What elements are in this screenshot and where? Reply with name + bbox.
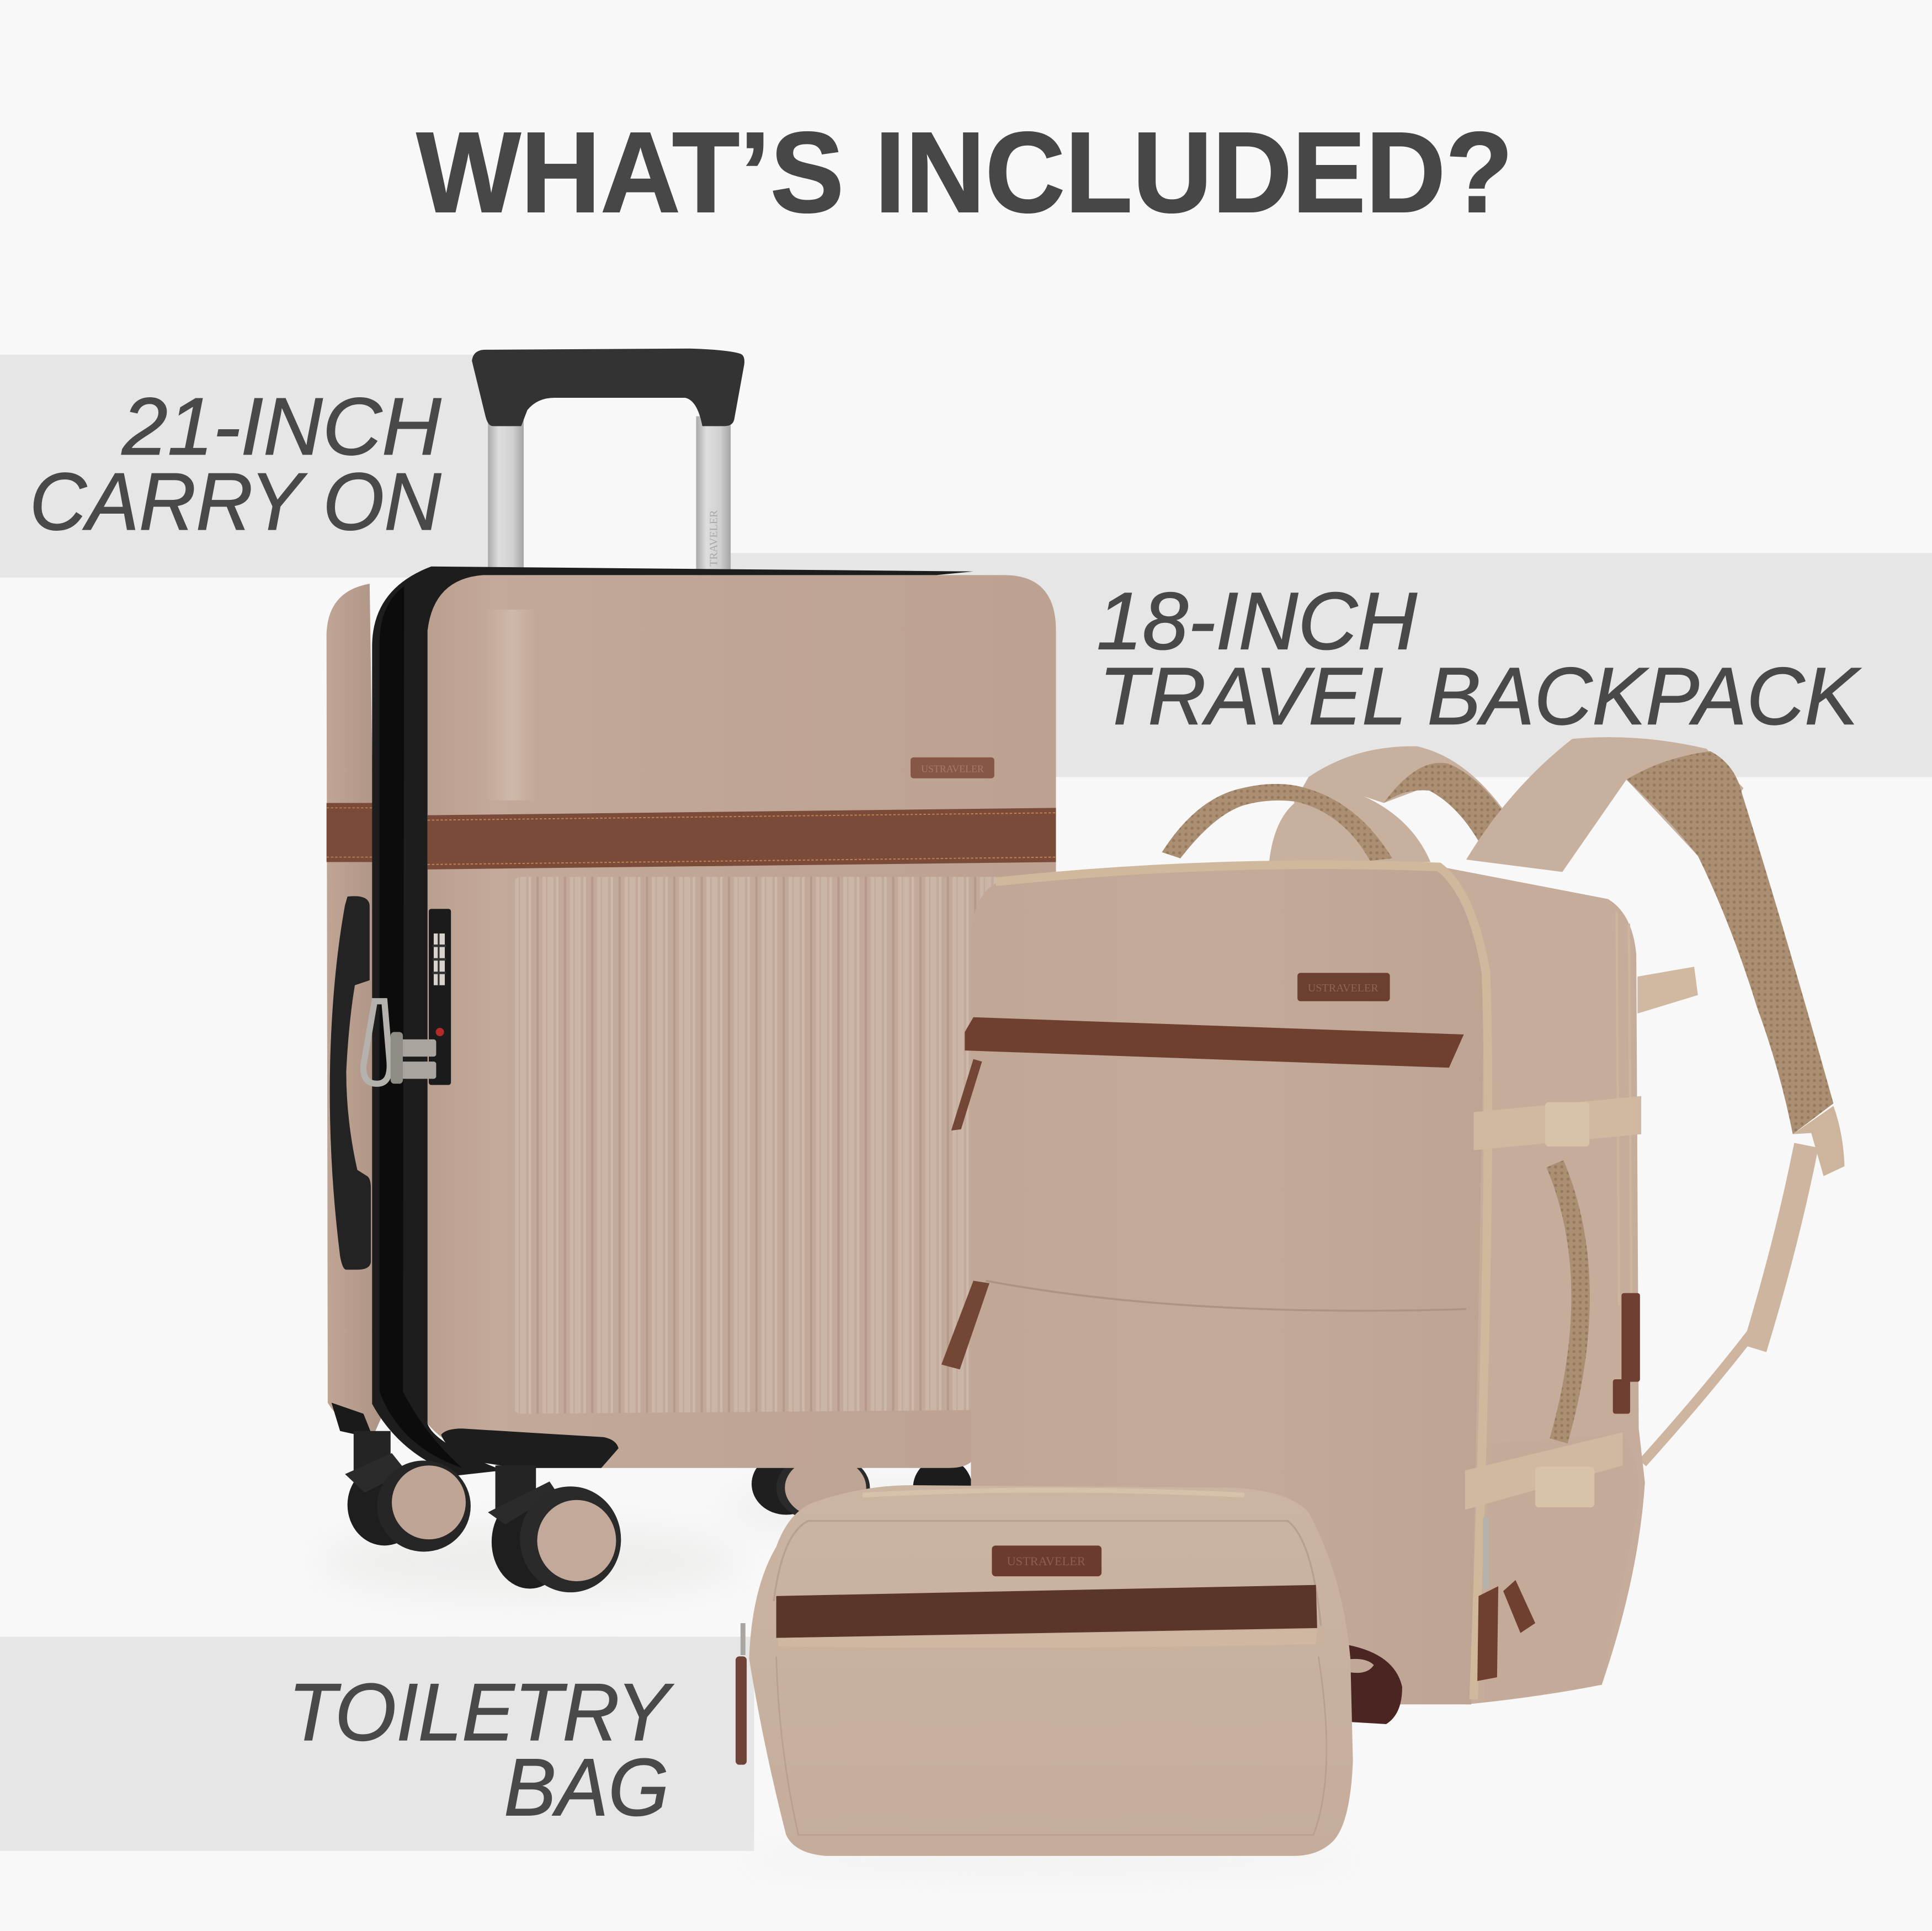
label: 21-inch carry on: 21-INCH: [121, 382, 441, 472]
label: 21-inch carry on: CARRY ON: [30, 457, 441, 547]
grab handle: [1162, 784, 1430, 862]
toiletry zipper pull: [736, 1623, 747, 1765]
connector strap: [1637, 967, 1698, 1013]
toiletry leather strip: [776, 1585, 1317, 1638]
side zipper pulls: [1613, 1293, 1640, 1413]
zipper pulls: [363, 1001, 436, 1084]
label band: carry on: [0, 355, 488, 578]
toiletry logo plate: [992, 1545, 1101, 1576]
backpack logo plate: USTRAVELER: [1308, 982, 1379, 994]
zipper and black trim: [372, 567, 973, 1475]
side panel: [1435, 866, 1645, 1704]
lower webbing strap: [1642, 1145, 1806, 1463]
label: toiletry bag: TOILETRY: [288, 1667, 674, 1758]
label: 18-inch travel backpack: [1097, 576, 1861, 742]
suitcase logo plate: [911, 758, 994, 778]
combination lock: [429, 909, 451, 1085]
side leather band: [327, 803, 376, 862]
front-right wheel: [488, 1465, 621, 1592]
lower side buckle strap: [1465, 1432, 1623, 1510]
front-left wheel: [345, 1431, 471, 1551]
label: 18-inch travel backpack: TRAVEL BACKPACK: [1099, 652, 1861, 742]
front shell: [428, 575, 1056, 1468]
label: 21-inch carry on: [30, 382, 441, 547]
label: toiletry bag: [288, 1667, 674, 1833]
toiletry logo plate: USTRAVELER: [1007, 1554, 1085, 1568]
ribbed lower shell: [512, 877, 1056, 1413]
lower pocket trim: [778, 1629, 1317, 1648]
telescopic handle: TRAVELER: [707, 510, 720, 567]
wheel housings: [332, 1402, 619, 1468]
right shoulder strap: [1466, 737, 1844, 1176]
backpack leather strip: [965, 1017, 1464, 1068]
loop handle: [1316, 1644, 1402, 1724]
toiletry bag: [736, 1485, 1402, 1856]
upper zipper pull: [951, 1059, 982, 1130]
front panel: [971, 863, 1485, 1704]
side panel seams: [1616, 911, 1631, 1305]
backpack logo plate: [1297, 973, 1390, 1001]
leather band: [428, 808, 1056, 870]
lower side pocket: [1485, 1434, 1639, 1702]
piping trim: [996, 865, 1488, 1699]
top seam: [774, 1521, 1321, 1625]
left shoulder strap: [1294, 746, 1505, 850]
upper side buckle strap: [1473, 1096, 1641, 1150]
label: toiletry bag: BAG: [504, 1742, 669, 1833]
rear wheels: [752, 1453, 972, 1522]
top zip track: [863, 1490, 1244, 1495]
side carry handle: [330, 896, 371, 1269]
pocket seam: [986, 1281, 1466, 1311]
title: WHAT’S INCLUDED?: [417, 108, 1513, 236]
label band: toiletry bag: [0, 1637, 754, 1851]
lower side seams: [776, 1656, 1327, 1835]
21-inch carry-on suitcase: [327, 349, 1056, 1592]
18-inch travel backpack: [941, 737, 1844, 1704]
surface highlight: [487, 610, 536, 801]
suitcase logo plate: USTRAVELER: [921, 764, 984, 775]
telescopic handle: [472, 349, 744, 577]
floor shadow: [321, 1486, 1355, 1869]
side shell: [327, 584, 382, 1438]
label: 18-inch travel backpack: 18-INCH: [1097, 576, 1417, 666]
side carry handle: [1555, 1164, 1580, 1441]
label band: backpack: [728, 553, 1932, 777]
bag body: [749, 1485, 1353, 1856]
lower zipper pull: [941, 1281, 989, 1369]
lower zipper pulls: [1477, 1517, 1535, 1681]
